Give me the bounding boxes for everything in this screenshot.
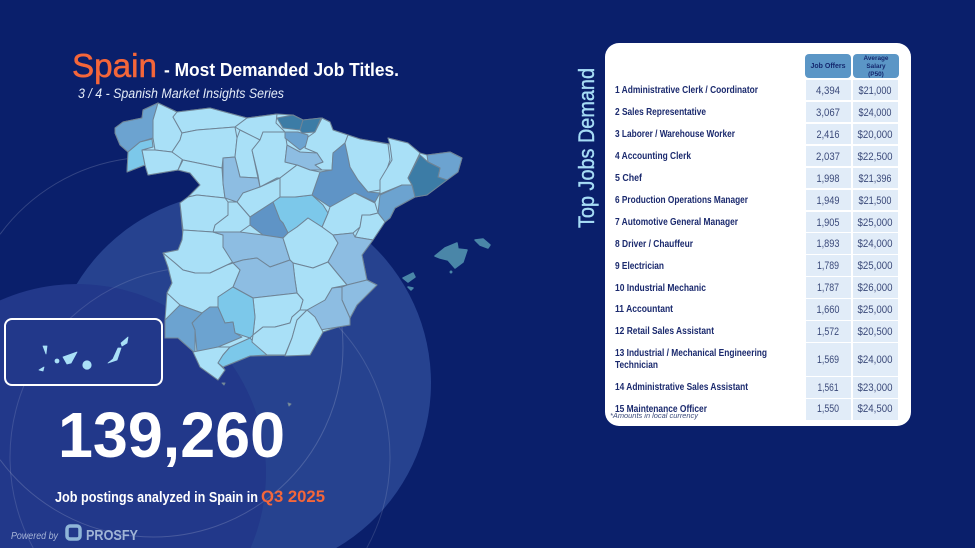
table rows: $25,000 — [858, 304, 892, 316]
table rows: $25,000 — [858, 260, 892, 272]
table rows: 1,550 — [817, 403, 839, 415]
panel: jobs table — [605, 43, 911, 426]
table rows — [615, 80, 898, 420]
table rows: 1,572 — [817, 326, 839, 338]
table rows: 1,905 — [816, 217, 840, 229]
table rows: 2,416 — [816, 129, 840, 141]
table rows: $25,000 — [858, 217, 892, 229]
table rows: 1,569 — [817, 354, 839, 366]
table rows: 2,037 — [816, 151, 840, 163]
table header: (P50) — [868, 71, 884, 78]
table header: Salary — [866, 63, 886, 70]
table rows: 12 Retail Sales Assistant — [615, 326, 715, 337]
table rows: 2 Sales Representative — [615, 107, 707, 118]
table rows: $26,000 — [858, 282, 892, 294]
table rows: $24,500 — [858, 403, 892, 415]
table rows: 15 Maintenance Officer — [615, 404, 707, 415]
table rows: 9 Electrician — [615, 261, 664, 272]
big number: 139,260 — [58, 399, 285, 471]
table rows: 1,787 — [817, 282, 839, 294]
caption: Job postings analyzed in Spain in — [55, 489, 258, 506]
powered by — [11, 526, 138, 544]
title: Spain — [72, 47, 157, 84]
table rows: 1,949 — [816, 195, 840, 207]
table rows: 5 Chef — [615, 173, 643, 184]
table rows: $24,000 — [858, 354, 892, 366]
powered by: Powered by — [11, 531, 59, 542]
table rows: Technician — [615, 360, 658, 371]
table rows: 7 Automotive General Manager — [615, 217, 738, 228]
table rows: $21,000 — [858, 85, 892, 97]
table rows: 4,394 — [816, 85, 840, 97]
table rows: 4 Accounting Clerk — [615, 151, 692, 162]
table rows: 3,067 — [816, 107, 840, 119]
footnote: *Amounts in local currency — [610, 411, 699, 420]
table rows: $20,000 — [858, 129, 892, 141]
side heading: Top Jobs Demand — [574, 68, 599, 228]
caption: Q3 2025 — [261, 488, 325, 506]
title — [72, 47, 399, 84]
table rows: 1,998 — [816, 173, 840, 185]
table rows: $23,000 — [858, 382, 892, 394]
table rows: 1,893 — [816, 238, 840, 250]
table rows: 8 Driver / Chauffeur — [615, 239, 693, 250]
table rows: 1,660 — [816, 304, 840, 316]
table rows: 1 Administrative Clerk / Coordinator — [615, 85, 758, 96]
table rows: $24,000 — [858, 107, 892, 119]
table rows: $21,396 — [858, 173, 892, 185]
map: Balearic Islands — [403, 239, 490, 290]
table header — [805, 54, 899, 78]
map: mainland Spain provinces — [115, 103, 462, 406]
background circles — [0, 157, 431, 548]
table rows: 11 Accountant — [615, 304, 674, 315]
table rows: 6 Production Operations Manager — [615, 195, 748, 206]
table rows: 3 Laborer / Warehouse Worker — [615, 129, 735, 140]
table rows: $24,000 — [858, 238, 892, 250]
table header: Job Offers — [810, 63, 846, 70]
table rows: 13 Industrial / Mechanical Engineering — [615, 348, 767, 359]
subtitle: 3 / 4 - Spanish Market Insights Series — [78, 86, 284, 101]
table header: Average — [864, 55, 889, 62]
table rows: 1,561 — [818, 382, 838, 394]
powered by: PROSFY — [86, 527, 138, 544]
table rows: $20,500 — [858, 326, 892, 338]
table rows: $22,500 — [858, 151, 892, 163]
icon: Prosfy logo — [67, 526, 80, 539]
title: - Most Demanded Job Titles. — [164, 60, 399, 80]
table rows: $21,500 — [858, 195, 892, 207]
table rows: 14 Administrative Sales Assistant — [615, 382, 749, 393]
table rows: 10 Industrial Mechanic — [615, 283, 707, 294]
table rows: 1,789 — [817, 260, 839, 272]
inset: Canary Islands — [5, 319, 162, 385]
